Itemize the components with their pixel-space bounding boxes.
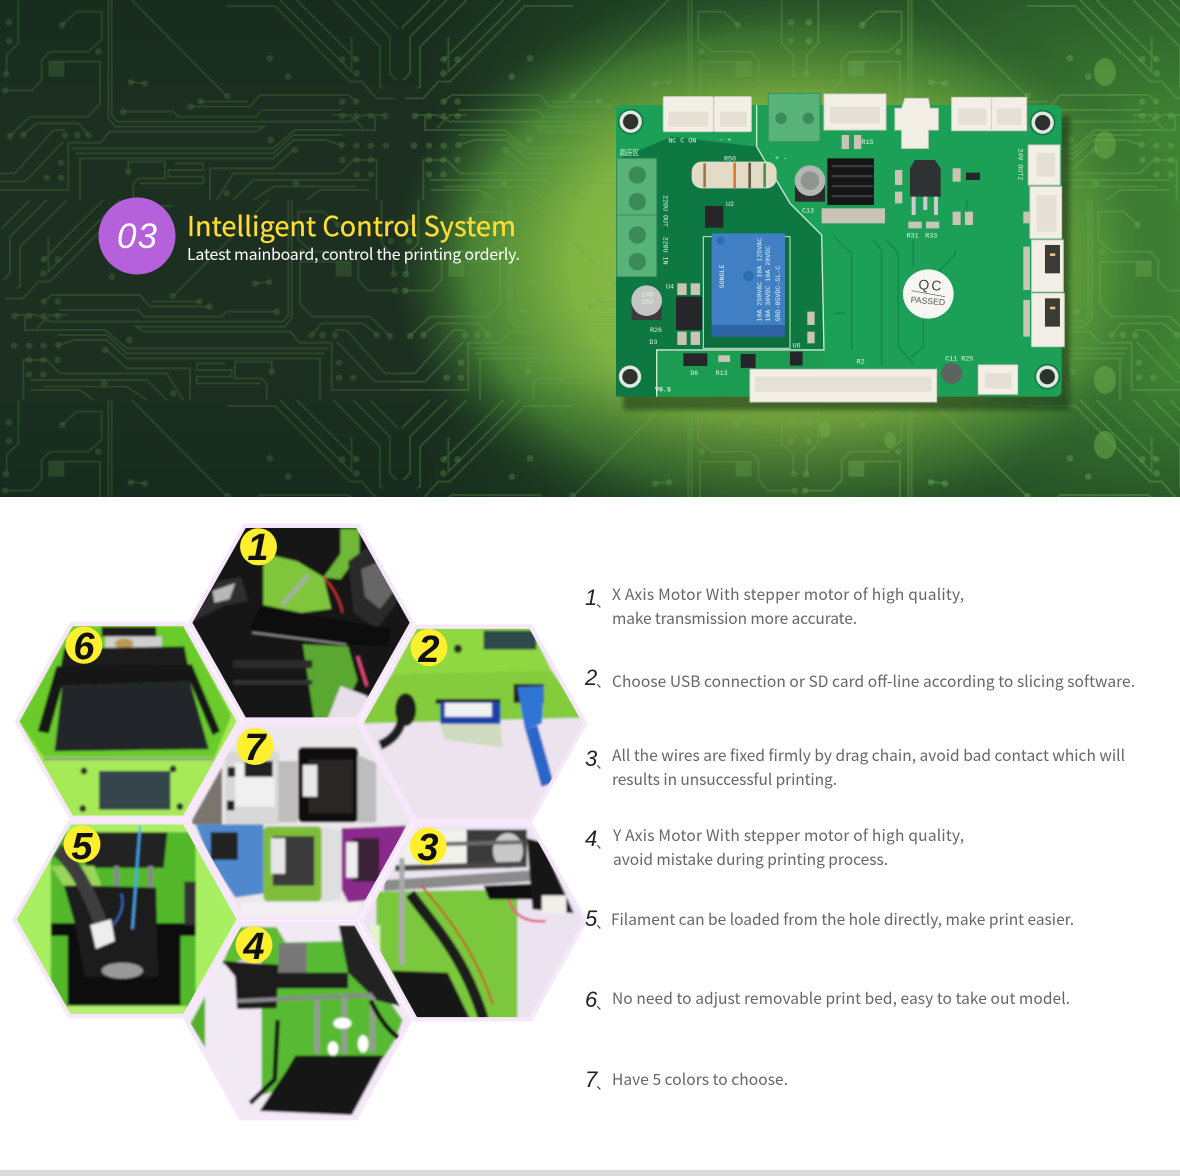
section number badge: 03 [117,217,158,256]
feature 7: 7 [585,1067,598,1092]
bottom divider strip [0,1170,1180,1176]
feature 6: 、 [596,994,610,1014]
feature 6: No need to adjust removable print bed, easy to take out model. [612,987,1070,1009]
silkscreen labels: 220U IN [661,237,669,265]
feature 3 [585,744,1125,790]
feature 1: X Axis Motor With stepper motor of high quality, [612,583,964,605]
capacitors: 100 [642,291,654,299]
hexagon 6: print bed [15,623,241,818]
banner: circuit board background [0,0,1180,497]
hexagon numbers: 6 [73,626,95,668]
relay [712,233,785,337]
feature 4: 、 [596,833,610,853]
silkscreen labels [619,136,1024,394]
silkscreen labels: R33 [925,231,937,239]
relay: SONGLE [718,264,726,288]
silkscreen labels: R13 [716,369,728,377]
feature 2: Choose USB connection or SD card off-line according to slicing software. [612,670,1135,692]
feature 4: avoid mistake during printing process. [613,848,888,870]
capacitors [631,165,962,384]
white connectors [663,94,1064,402]
feature 4: Y Axis Motor With stepper motor of high quality, [612,824,964,846]
hexagon 4: Y axis motor [184,921,414,1119]
silkscreen labels: V0.5 [655,386,671,394]
hexagon numbers: 1 [247,527,269,569]
feature 5: Filament can be loaded from the hole directly, make print easier. [611,908,1074,930]
silkscreen labels: U6 [793,341,801,349]
subheading: Latest mainboard, control the printing orderly. [187,241,520,265]
QC sticker [903,269,954,319]
feature 3: All the wires are fixed firmly by drag chain, avoid bad contact which will [612,744,1125,766]
QC sticker: PASSED [910,295,946,307]
hexagon numbers [71,527,440,968]
section number badge [98,198,176,274]
hexagon 1: X axis motor [188,526,414,720]
hexagon 7: colour options [186,722,414,919]
hexagon 2: USB and SD card [357,625,587,822]
silkscreen labels: 高压区 [619,147,640,157]
relay: 10A 250VAC 10A 125VAC [756,238,764,322]
silkscreen labels: U2 [726,200,734,208]
hexagon numbers: 7 [244,727,267,769]
feature 5: 、 [596,913,610,933]
relay: 10A 30VDC 10A 28VDC [764,246,772,322]
silkscreen labels: U4 [666,282,674,290]
regulator chip [910,160,941,215]
feature 5: 5 [585,906,598,931]
QC sticker: QC [918,276,944,294]
hexagon numbers: 3 [417,827,439,869]
hexagon numbers: 2 [417,629,440,671]
mounting holes [618,110,1059,389]
feature 3: results in unsuccessful printing. [612,768,837,790]
feature 7: Have 5 colors to choose. [612,1068,788,1090]
silkscreen labels: C13 [802,207,814,215]
silkscreen labels: R26 [650,326,662,334]
hexagon photo cluster [11,526,587,1119]
silkscreen labels: + - [775,154,787,162]
hexagon 5: filament feed [11,820,241,1018]
power resistor [692,162,777,188]
feature 1: 、 [596,592,610,612]
small components [676,173,980,368]
heat sink [827,158,874,205]
feature 2: 、 [596,672,610,692]
feature 4: 4 [585,826,597,851]
relay: SRD-05VDC-SL-C [774,266,782,322]
silkscreen labels: C11 R25 [945,355,973,363]
circuit board [616,93,1064,402]
silkscreen labels: R2 [857,357,865,365]
feature 3: 、 [596,753,610,773]
traces [833,200,967,367]
silkscreen labels: 220U OUT [661,195,669,227]
jumper headers [1045,245,1060,327]
feature 1: 1 [585,585,597,610]
feature 7: 、 [596,1074,610,1094]
mainboard photo [616,93,1070,410]
feature 1 [585,583,964,629]
capacitors: 35V [642,298,654,306]
hexagon numbers: 4 [242,926,265,968]
feature 1: make transmission more accurate. [612,607,857,629]
silkscreen labels: D6 [690,369,698,377]
silkscreen labels: 24V OUT2 [1016,148,1024,180]
silkscreen labels: NC C ON [668,137,696,145]
feature 6: 6 [585,987,598,1012]
silkscreen labels: R31 [907,231,919,239]
feature 2: 2 [584,665,597,690]
silkscreen labels: D3 [649,338,657,346]
green terminal blocks [617,93,820,277]
hexagon 3: drag chain [357,822,587,1020]
heading: Intelligent Control System [187,205,516,244]
silkscreen labels: R50 [724,155,736,163]
board shadow [623,117,1070,410]
feature 4 [585,824,964,870]
silkscreen labels: R15 [862,138,874,146]
feature 3: 3 [585,746,598,771]
hexagon numbers: 5 [71,826,93,868]
yellow number discs [64,528,447,964]
silkscreen labels: - + [719,136,731,144]
